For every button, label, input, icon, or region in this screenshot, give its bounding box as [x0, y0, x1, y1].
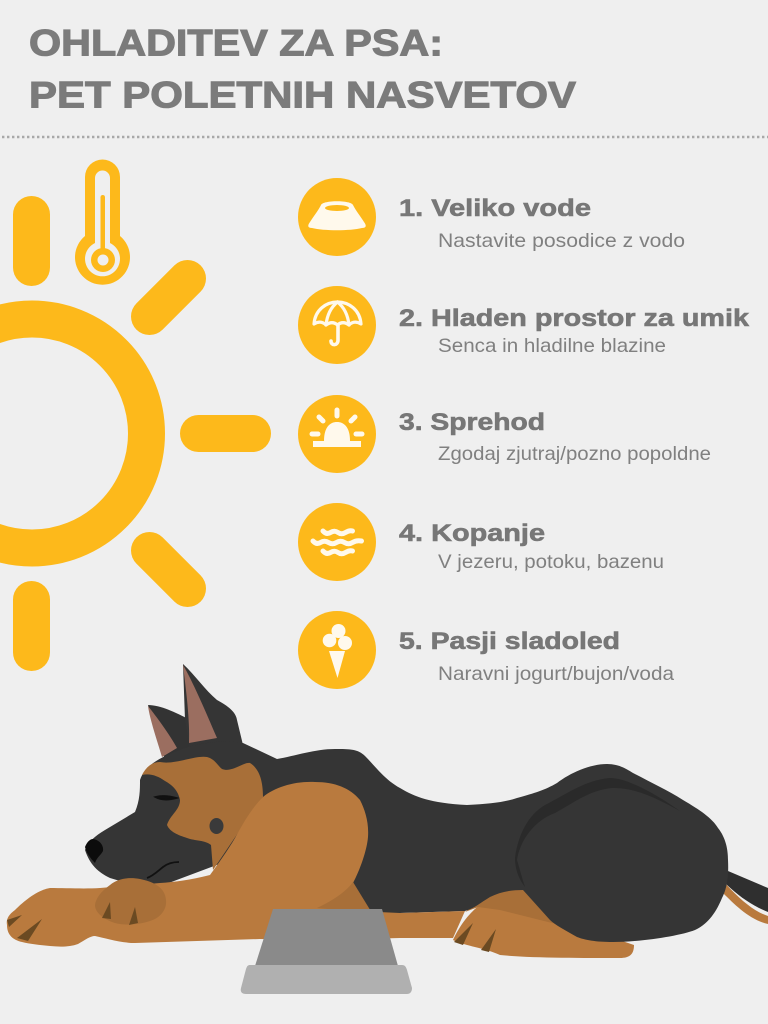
front paw toes — [7, 915, 42, 941]
icon: sun — [0, 214, 252, 652]
water bowl — [241, 909, 412, 994]
title: OHLADITEV ZA PSA: — [29, 22, 443, 64]
chest shadow — [317, 882, 372, 913]
ear: back — [148, 705, 195, 760]
heading: 2. Hladen prostor za umik — [399, 305, 750, 332]
description: Senca in hladilne blazine — [438, 335, 666, 357]
illustration: sleeping dog — [7, 664, 768, 958]
heading: 5. Pasji sladoled — [399, 628, 620, 655]
description: Nastavite posodice z vodo — [438, 230, 685, 252]
heading: 1. Veliko vode — [399, 195, 591, 222]
eye: closed — [155, 796, 177, 800]
hind paw toes — [454, 923, 496, 952]
body — [85, 742, 728, 942]
ear: front — [183, 664, 243, 750]
ear inner: front — [183, 665, 217, 743]
description: Naravni jogurt/bujon/voda — [438, 663, 674, 685]
icon: bowl — [298, 178, 376, 256]
front leg and chest — [7, 782, 465, 947]
head marking — [142, 757, 263, 870]
icon: umbrella — [298, 286, 376, 364]
icon: thermometer — [75, 160, 130, 285]
item 3: walk — [298, 395, 711, 473]
belly shading — [465, 888, 560, 925]
tail — [723, 871, 768, 924]
item 5: ice cream — [298, 611, 674, 689]
icon: waves — [298, 503, 376, 581]
item 2: shade — [298, 286, 750, 364]
icon: ice cream — [298, 611, 376, 689]
hind leg — [453, 905, 634, 958]
ear hole — [210, 818, 224, 834]
heading: 3. Sprehod — [399, 409, 545, 436]
title: PET POLETNIH NASVETOV — [29, 74, 576, 116]
nose — [85, 839, 103, 863]
item 1: water — [298, 178, 685, 256]
paw on top — [95, 878, 166, 925]
haunch crease — [515, 778, 680, 887]
icon: sunrise — [298, 395, 376, 473]
heading: 4. Kopanje — [399, 520, 545, 547]
title — [29, 22, 576, 116]
item 4: swimming — [298, 503, 664, 581]
description: V jezeru, potoku, bazenu — [438, 551, 664, 573]
ear inner: back — [148, 706, 177, 757]
mouth — [147, 862, 179, 878]
description: Zgodaj zjutraj/pozno popoldne — [438, 443, 711, 465]
